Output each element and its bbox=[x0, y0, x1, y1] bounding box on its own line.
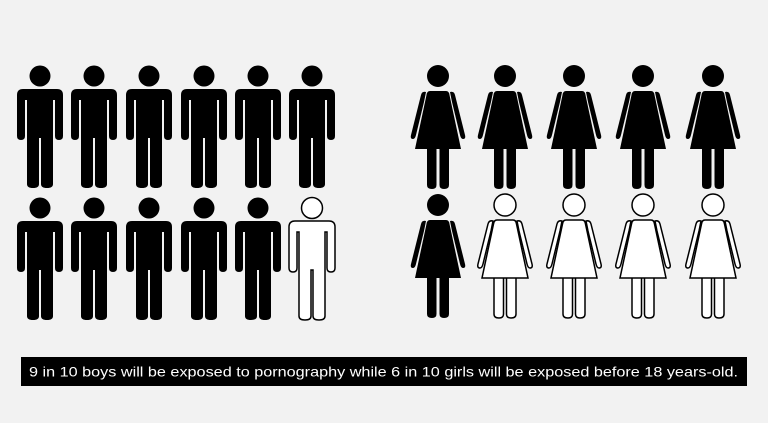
boy row 2 bbox=[17, 198, 335, 320]
girls group bbox=[411, 65, 740, 318]
boy row 1 bbox=[17, 66, 335, 188]
boys group bbox=[17, 66, 335, 320]
girl row 1 bbox=[411, 65, 740, 189]
caption bar bbox=[21, 357, 747, 386]
caption bar: 9 in 10 boys will be exposed to pornography while 6 in 10 girls will be exposed before 18 years-old. bbox=[29, 364, 738, 380]
girl row 2 bbox=[411, 194, 740, 318]
